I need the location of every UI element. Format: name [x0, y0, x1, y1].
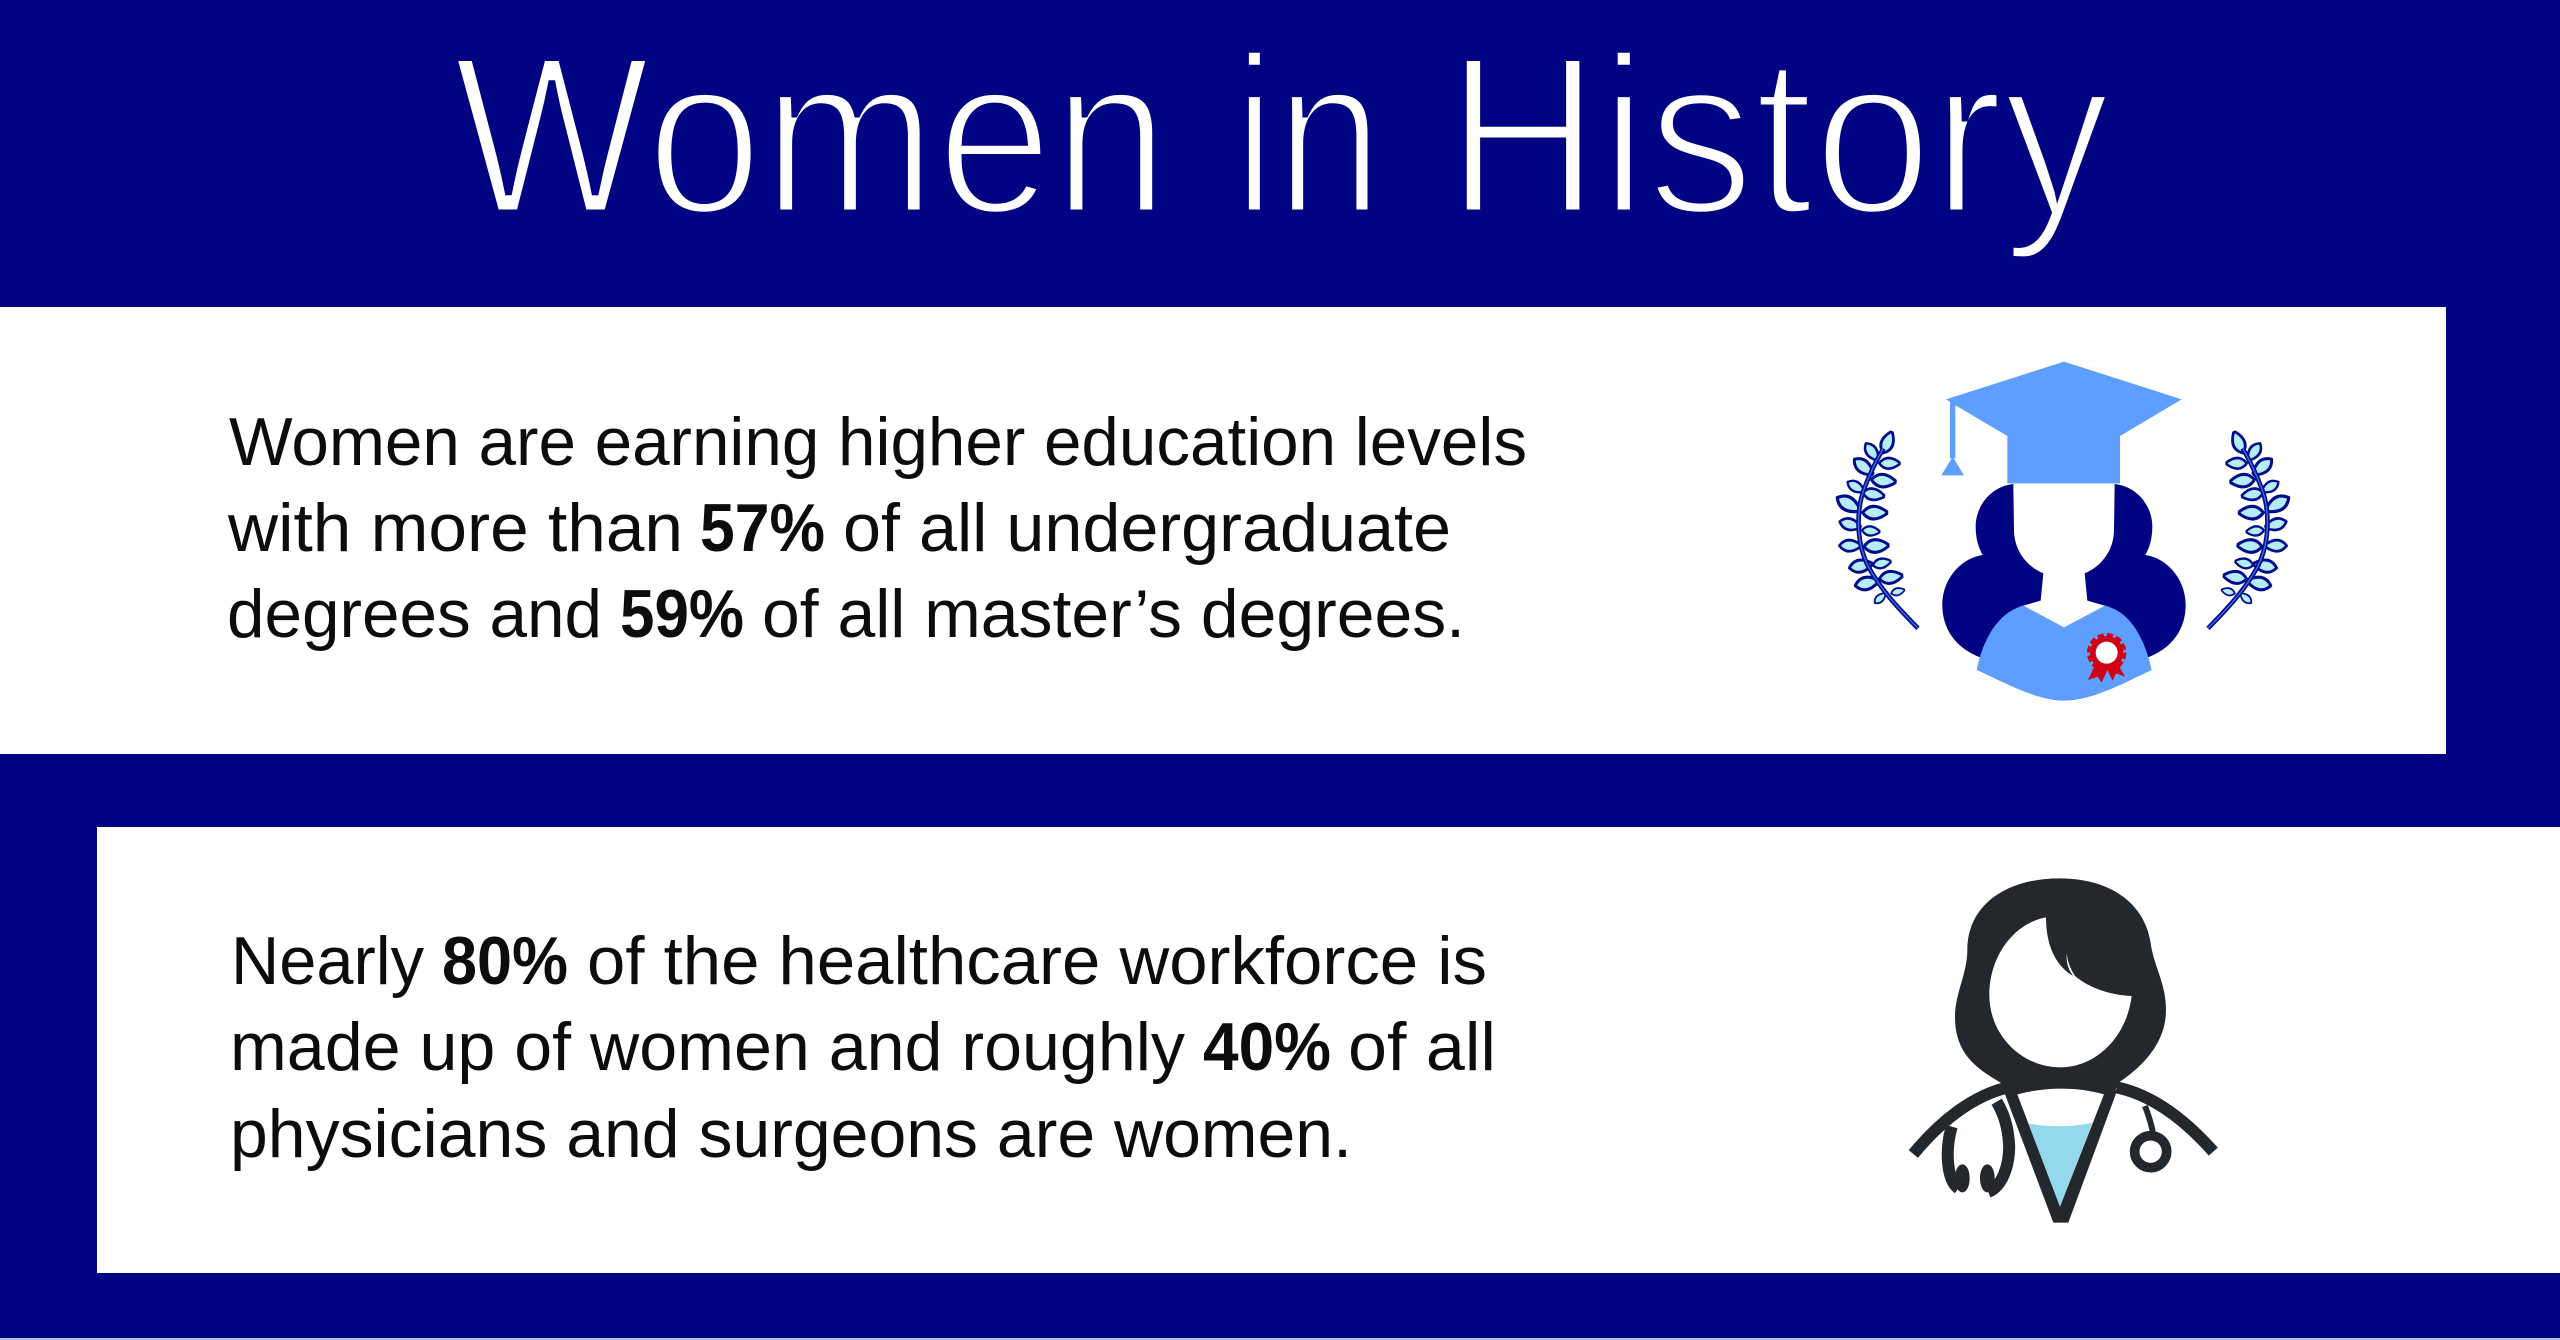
title: History — [1446, 8, 2110, 261]
icon: coat collar — [2004, 1086, 2117, 1223]
text block: education statistics: of all master’s degrees. — [762, 576, 1465, 652]
text block: education statistics: degrees and — [227, 576, 602, 652]
icon: left laurel — [1834, 430, 1918, 628]
panel: higher education — [0, 307, 2446, 754]
icon: hair — [1942, 484, 2186, 657]
text block: healthcare statistics: 40% — [1203, 1009, 1331, 1085]
icon: right laurel — [2208, 430, 2292, 628]
title: Women — [453, 8, 1169, 261]
panel: healthcare — [97, 827, 2560, 1273]
icon: shoulders — [1913, 1087, 2213, 1154]
icon: stethoscope — [1948, 1102, 2167, 1192]
text block: education statistics — [227, 404, 1527, 652]
icon: hair — [1955, 878, 2166, 1093]
icon: award ribbon — [2088, 635, 2125, 683]
icon: graduate woman with laurels — [1834, 362, 2292, 701]
text block: healthcare statistics: of all — [1348, 1009, 1496, 1085]
text block: education statistics: of all undergraduate — [843, 490, 1451, 566]
text block: education statistics: with more than — [227, 490, 683, 566]
text block: education statistics: 57% — [700, 490, 825, 566]
icon: graduation cap — [1941, 362, 2182, 483]
text block: healthcare statistics — [230, 923, 1496, 1172]
title: in — [1233, 8, 1383, 261]
text block: healthcare statistics: physicians and surgeons are women. — [230, 1096, 1352, 1172]
title — [453, 8, 2110, 261]
icon: face — [1989, 917, 2132, 1067]
text block: education statistics: Women are earning higher education levels — [229, 404, 1527, 480]
icon: female doctor with stethoscope — [1913, 878, 2213, 1223]
text block: healthcare statistics: made up of women and roughly — [230, 1009, 1185, 1085]
text block: healthcare statistics: Nearly — [231, 923, 424, 999]
icon: gown — [1977, 606, 2152, 701]
text block: healthcare statistics: of the healthcare workforce is — [587, 923, 1487, 999]
text block: healthcare statistics: 80% — [442, 923, 568, 999]
text block: education statistics: 59% — [620, 576, 744, 652]
